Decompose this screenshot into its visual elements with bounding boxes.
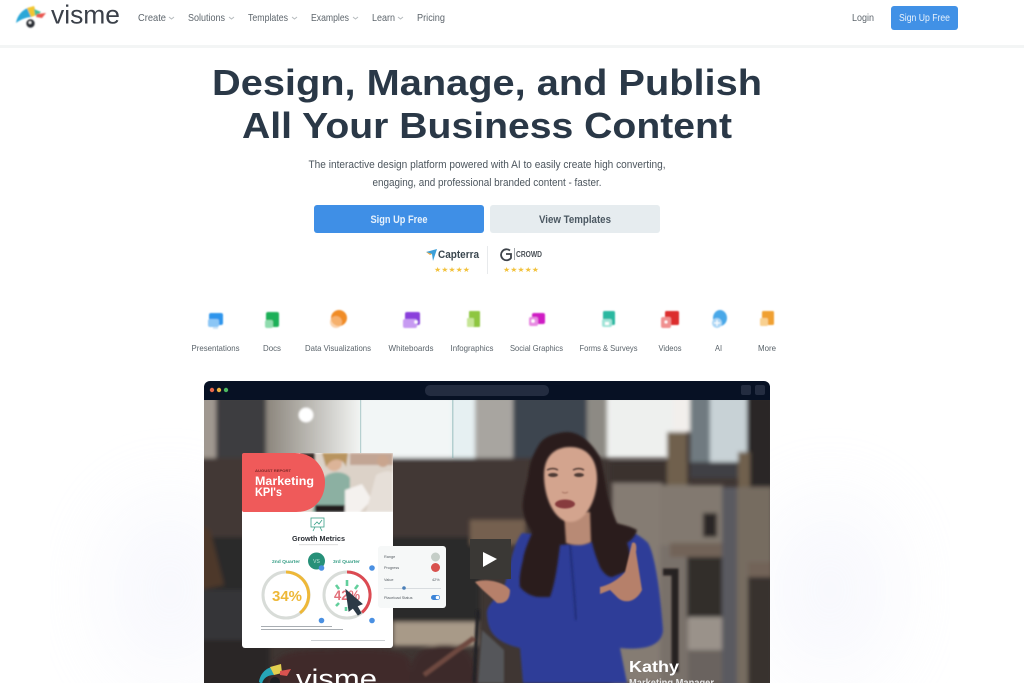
eyes and mouth	[547, 468, 584, 508]
quarter labels and VS badge: 2nd Quarter	[272, 559, 300, 565]
category labels: Forms & Surveys	[580, 343, 638, 353]
card header photo	[300, 453, 393, 512]
card title: AUGUST REPORT	[255, 468, 292, 473]
category labels: Infographics	[450, 343, 494, 353]
controls panel: Value	[384, 578, 393, 582]
quarter labels and VS badge: VS	[313, 559, 320, 565]
card coral header	[242, 453, 325, 512]
donut: 42 percent with cursor: 42%	[334, 587, 361, 603]
icon: videos	[661, 311, 679, 328]
category labels: Videos	[658, 343, 682, 353]
windows band	[200, 396, 216, 458]
navigation links: Pricing	[417, 12, 445, 24]
navigation links: Learn	[372, 12, 395, 24]
icon: data visualizations	[330, 310, 347, 328]
icon: docs	[265, 312, 279, 328]
card footnote	[261, 626, 385, 641]
navigation links: Solutions	[188, 12, 225, 24]
category labels	[192, 343, 776, 353]
category labels: Presentations	[192, 343, 240, 353]
capterra rating	[426, 249, 480, 274]
category labels: Docs	[263, 343, 281, 353]
donut: 34 percent	[263, 572, 309, 618]
icon: social graphics	[529, 313, 545, 326]
g2 crowd rating	[501, 248, 542, 274]
sphere lamp	[298, 408, 314, 422]
category labels: More	[758, 343, 776, 353]
logo: visme: visme	[51, 0, 120, 30]
controls panel	[378, 546, 446, 608]
blouse	[487, 529, 663, 683]
play button	[470, 539, 511, 579]
navigation links: Create	[138, 12, 166, 24]
g2 crowd rating: ★★★★★	[503, 266, 539, 274]
category labels: Data Visualizations	[305, 343, 371, 353]
cream floor	[393, 622, 478, 646]
main heading: Design, Manage, and Publish	[212, 62, 762, 103]
main heading: All Your Business Content	[242, 105, 732, 146]
button: view templates	[490, 205, 660, 233]
navigation bar	[0, 0, 1024, 48]
browser title bar	[204, 381, 770, 400]
navigation links: Templates	[248, 12, 288, 24]
product categories row	[192, 310, 776, 353]
presenter name	[629, 659, 714, 683]
wall	[204, 455, 514, 462]
neck	[564, 512, 591, 545]
controls panel: Range	[384, 555, 395, 559]
booths	[612, 483, 662, 683]
sign up button (nav): Sign Up Free	[899, 13, 950, 24]
icon: forms and surveys	[602, 311, 615, 327]
button: sign up free: Sign Up Free	[370, 214, 428, 226]
woman presenter	[475, 432, 663, 683]
login link: Login	[852, 12, 874, 24]
controls panel: 42%	[432, 578, 440, 582]
g2 crowd rating: CROWD	[516, 250, 542, 259]
category labels: Social Graphics	[510, 343, 563, 353]
growth metrics heading: Growth Metrics	[292, 536, 345, 543]
quarter labels and VS badge: 3rd Quarter	[333, 559, 360, 565]
quarter labels and VS badge	[272, 552, 360, 570]
icon: ai	[712, 310, 727, 328]
category labels: AI	[715, 343, 722, 353]
watermark: visme logo	[259, 664, 377, 683]
hands	[475, 580, 510, 603]
subheading: The interactive design platform powered with AI to easily create high converting,	[308, 159, 666, 171]
capterra rating: ★★★★★	[434, 266, 470, 274]
donut: 34 percent: 34%	[272, 588, 302, 605]
blouse folds	[570, 545, 576, 620]
button: sign up free	[314, 205, 484, 233]
selection handles	[319, 565, 375, 623]
donut: 42 percent with cursor	[324, 572, 370, 618]
icon: more	[760, 311, 774, 326]
card title: KPI's	[255, 487, 282, 499]
window frames	[360, 400, 454, 458]
capterra rating: Capterra	[438, 249, 480, 261]
icon: presentation board	[311, 518, 324, 531]
navigation links: Examples	[311, 12, 349, 24]
controls panel: Placeload Status	[384, 596, 413, 600]
leather sofa	[268, 649, 412, 683]
ratings	[426, 246, 542, 274]
icon: presentations	[208, 313, 223, 328]
main heading	[212, 62, 762, 146]
sign up button (nav)	[891, 6, 958, 30]
hair back	[520, 432, 637, 597]
category labels: Whiteboards	[388, 343, 434, 353]
video scene	[200, 396, 774, 683]
card title: Marketing	[255, 476, 314, 488]
logo: visme	[16, 0, 120, 30]
card title	[255, 470, 314, 496]
subheading: engaging, and professional branded content - faster.	[372, 177, 602, 189]
icon: whiteboards	[403, 312, 420, 328]
sofa back left	[200, 537, 480, 622]
video window	[200, 381, 774, 683]
button: view templates: View Templates	[539, 214, 611, 226]
icon: infographics	[467, 311, 480, 327]
marketing report card	[242, 453, 393, 648]
controls panel: Progress	[384, 566, 399, 570]
face	[544, 447, 597, 522]
chair	[424, 572, 675, 683]
presenter name: Kathy	[629, 659, 679, 676]
subheading	[308, 159, 666, 189]
navigation links	[138, 12, 445, 24]
